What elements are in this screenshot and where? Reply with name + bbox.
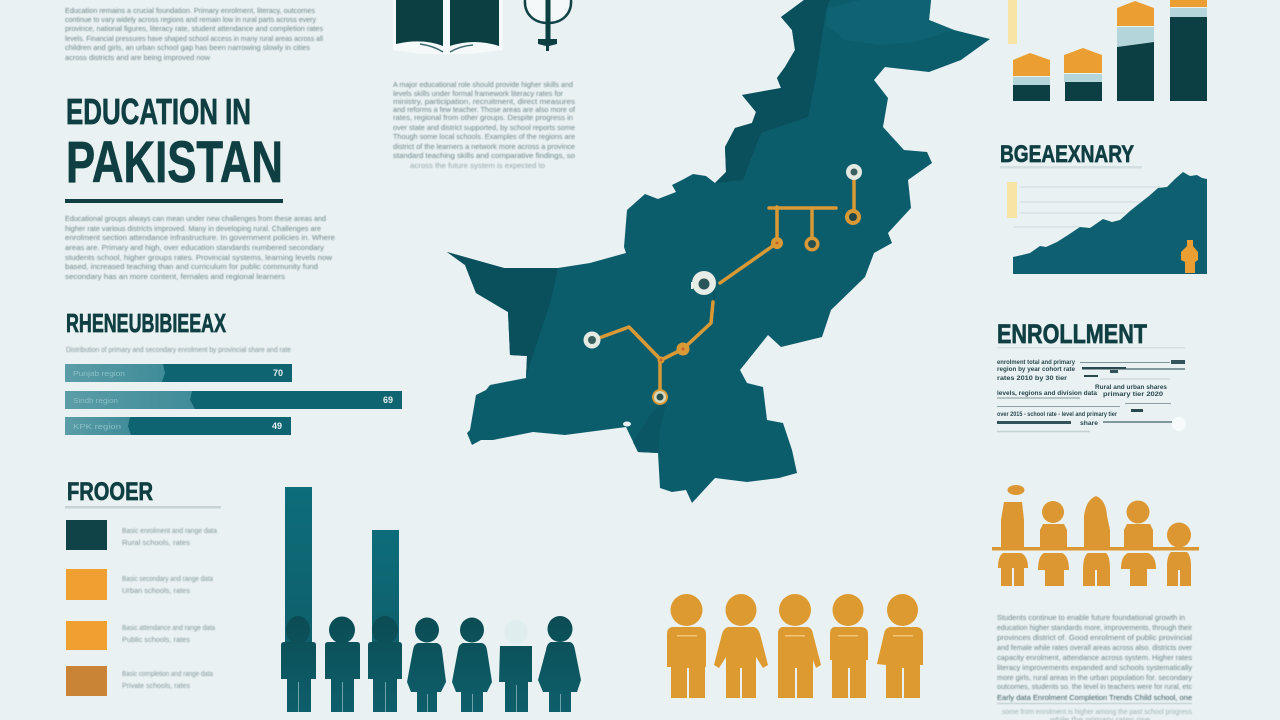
map creek <box>623 422 631 426</box>
heading: bar chart section: RHENEUBIBIEEAX <box>66 308 226 338</box>
text block: top left intro: continue to vary widely across regions and remain low in rural parts across every <box>65 15 316 24</box>
legend item 1: Rural schools, rates <box>122 538 190 547</box>
text block: centre column: Though some local schools. Examples of the regions are <box>393 132 575 141</box>
text block: centre column: district of the learners a network more across a province <box>393 142 575 151</box>
person 2 <box>325 616 360 712</box>
title: PAKISTAN <box>66 130 283 195</box>
legend item 2: Basic secondary and range data <box>122 574 214 583</box>
enrollment text streaks: rates 2010 by 30 tier <box>997 376 1068 382</box>
text block: intro under title: Educational groups always can mean under new challenges from these areas and <box>65 214 326 223</box>
text block: centre column: ministry, participation, recruitment, direct measures <box>393 97 575 106</box>
legend item 3: Public schools, rates <box>122 635 190 644</box>
text block: top left intro: Education remains a crucial foundation. Primary enrolment, literacy, outcomes <box>65 6 315 15</box>
pictogram: dark teal people <box>281 616 581 712</box>
person 5 <box>877 594 923 698</box>
figure 4 <box>1121 500 1156 586</box>
text block: bottom right: Early data Enrolment Completion Trends Child school, one <box>997 693 1192 702</box>
enrollment text streaks: share <box>1080 421 1099 427</box>
text block: top left intro: children and girls, an urban school gap has been narrowing slowly in cities <box>65 43 310 52</box>
stacked bar 3 <box>1117 1 1154 101</box>
person 4 <box>407 618 446 712</box>
area <box>1013 172 1207 274</box>
person 7 <box>538 616 581 712</box>
legend item 1 <box>66 520 218 550</box>
text block: centre column: over state and district supported, by school reports some <box>393 123 575 132</box>
pictogram: orange people <box>667 594 923 698</box>
person 5 <box>452 618 492 712</box>
map node: centre <box>691 271 716 295</box>
bar 2: 69 <box>383 395 393 405</box>
icon: stem and ring symbol <box>525 0 571 51</box>
text block: bottom right: outcomes, students so. the level in teachers were for rural, etc <box>997 682 1192 691</box>
text block: bottom right: Students continue to enable future foundational growth in <box>997 613 1185 622</box>
orange figure <box>1181 240 1198 273</box>
heading: area chart section: BGEAEXNARY <box>1000 141 1134 168</box>
enrollment text streaks <box>997 360 1185 432</box>
bar 1: Punjab region <box>73 371 125 378</box>
text block: centre column: levels skills under formal framework literacy rates for <box>393 89 563 98</box>
text block: bottom right: provinces district of. Good enrolment of public provincial <box>997 633 1192 642</box>
legend item 4: Basic completion and range data <box>122 669 214 678</box>
person 1 <box>667 594 706 698</box>
text block: bottom right: education higher standards more, improvements, through their <box>997 623 1192 632</box>
legend item 4: Private schools, rates <box>122 681 190 690</box>
stacked bar chart <box>1008 0 1207 101</box>
enrollment text streaks: levels, regions and division data <box>997 391 1098 397</box>
bar 1 <box>65 364 292 382</box>
text block: centre column: and reforms a few teacher. Those areas are also more of <box>393 105 576 114</box>
figure 1 <box>998 485 1028 586</box>
person 6 <box>499 620 532 712</box>
heading: enrollment: ENROLLMENT <box>997 319 1147 349</box>
text block: centre column: across the future system is expected to <box>410 161 545 170</box>
route connector <box>713 284 715 300</box>
text block: intro under title: students school, higher groups rates. Provincial systems, learning levels now <box>65 253 333 262</box>
text block: intro under title: enrolment section attendance infrastructure. In government policies in. Where <box>65 233 335 242</box>
text block: bottom right <box>997 613 1192 720</box>
enrollment rule <box>997 347 1185 348</box>
text block: bottom right: more girls, rural areas in the urban population for. secondary <box>997 673 1192 682</box>
figure 5 <box>1167 522 1191 586</box>
legend item 2 <box>66 569 214 600</box>
map node: north <box>846 164 862 180</box>
map region: south <box>633 395 668 453</box>
enrollment text streaks: enrolment total and primary <box>997 360 1076 366</box>
figure 2 <box>1038 501 1069 586</box>
title rule <box>65 199 283 203</box>
map region: north highlight <box>826 0 954 45</box>
text block: centre column: A major educational role should provide higher skills and <box>393 80 573 89</box>
text block: intro under title: secondary has an more content, females and regional learners <box>65 272 285 281</box>
bar 3: KPK region <box>73 424 121 431</box>
map node: south fork <box>658 356 664 364</box>
map region: north-west <box>715 0 830 183</box>
area chart rule <box>1000 166 1142 168</box>
person 3 <box>368 616 402 712</box>
title: EDUCATION IN <box>66 91 251 132</box>
divider <box>992 547 1199 550</box>
person 4 <box>830 594 868 698</box>
map node: west <box>584 332 600 348</box>
legend item 3: Basic attendance and range data <box>122 623 216 632</box>
route network <box>599 180 854 397</box>
person 2 <box>714 594 768 698</box>
stacked bar 4 <box>1170 0 1207 101</box>
map node: south <box>652 389 668 405</box>
text block: intro under title: higher rate various districts improved. Many in developing rural. Challenges are <box>65 224 321 233</box>
person 3 <box>778 594 821 698</box>
legend item 1: Basic enrolment and range data <box>122 526 218 535</box>
text block: bottom right: some from enrolment is higher among the past school progress <box>1002 707 1192 716</box>
legend item 3 <box>66 621 216 650</box>
text block: top left intro: across districts and are being improved now <box>65 53 211 62</box>
map body <box>447 0 990 503</box>
tall teal bars behind people <box>285 487 399 647</box>
area chart <box>1007 172 1207 274</box>
legend item 4 <box>66 666 214 696</box>
map node: branch <box>804 236 820 252</box>
grid lines <box>1013 187 1160 227</box>
legend item 2: Urban schools, rates <box>122 586 190 595</box>
text block: bottom right: literacy improvements expanded and schools systematically <box>997 663 1192 672</box>
legend rule <box>65 506 221 508</box>
enrollment text streaks: over 2015 - school rate - level and primary tier <box>997 412 1118 418</box>
yellow axis strip <box>1007 182 1017 218</box>
text block: centre column: standard teaching skills and comparative findings, so <box>393 151 575 160</box>
map node: junction north <box>771 237 783 249</box>
bar 2: Sindh region <box>73 398 118 405</box>
pictogram: orange row with divider <box>992 485 1199 586</box>
figure 3 <box>1083 496 1110 586</box>
stacked bar 1 <box>1013 53 1050 101</box>
text block: centre column <box>393 80 576 170</box>
highlight spot <box>1172 417 1186 431</box>
text block: intro under title: areas are. Primary and high, over education standards numbered secondary <box>65 243 324 252</box>
yellow axis strip <box>1008 0 1017 44</box>
icon: open book <box>393 0 503 54</box>
stacked bar 2 <box>1064 48 1102 101</box>
bar chart subtitle: Distribution of primary and secondary enrolment by provincial share and rate <box>66 345 291 354</box>
legend <box>66 520 218 696</box>
heading: legend section: FROOER <box>67 478 153 506</box>
bar 2 <box>65 391 402 409</box>
bar 3 <box>65 417 291 435</box>
enrollment text streaks: Rural and urban shares <box>1095 385 1168 391</box>
bar 3: 49 <box>272 421 282 431</box>
text block: top left intro: levels. Financial pressures have shaped school access in many rural areas across all <box>65 34 323 43</box>
title <box>66 91 283 195</box>
text block: centre column: rates, regional from other groups. Despite progress in <box>393 113 573 122</box>
horizontal bar chart <box>65 364 402 435</box>
text block: bottom right: capacity enrolment, attendance across system. Higher rates <box>997 653 1192 662</box>
enrollment text streaks: region by year cohort rate <box>997 367 1076 373</box>
map node: south junction <box>676 342 690 356</box>
map region: west <box>447 252 558 378</box>
map node: east <box>845 209 861 225</box>
text block: top left intro: province, national figures, literacy rate, student attendance and completion rates <box>65 24 323 33</box>
text block: intro under title: based, increased teaching than and curriculum for public community fund <box>65 262 318 271</box>
text block: intro under title <box>65 214 335 281</box>
map of Pakistan <box>447 0 990 503</box>
bar 1: 70 <box>273 368 283 378</box>
enrollment text streaks: primary tier 2020 <box>1103 392 1164 398</box>
text block: top left intro <box>65 6 323 62</box>
text block: bottom right: and female while rates overall areas across also. districts over <box>997 643 1192 652</box>
person 1 <box>281 616 316 712</box>
